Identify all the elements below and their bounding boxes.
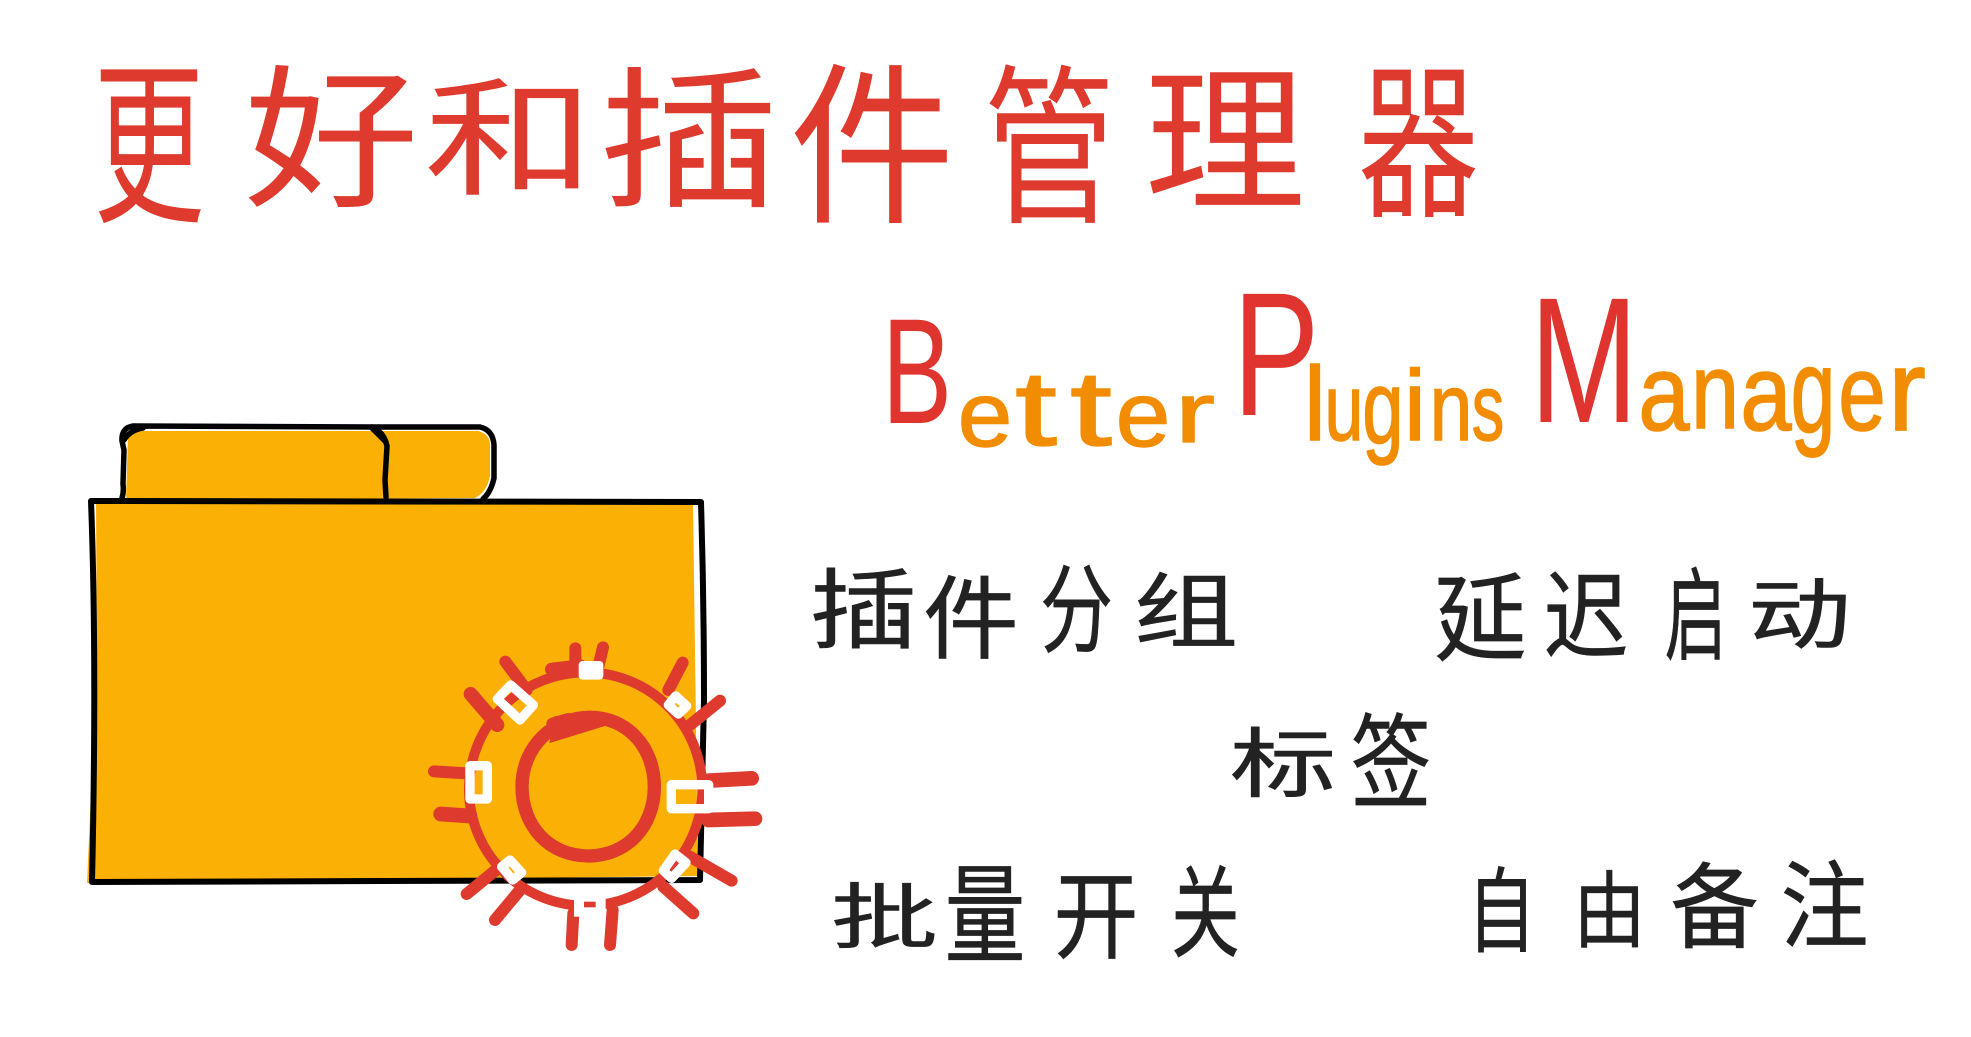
icon: folder <box>87 426 704 883</box>
feature label: 批量开关: 量 <box>945 857 1025 977</box>
feature label: 插件分组: 分 <box>1040 557 1113 666</box>
title: 更好和插件管理器 <box>94 49 1479 247</box>
feature label: 自由备注: 注 <box>1780 855 1869 960</box>
selection handles <box>470 661 709 917</box>
feature label: 插件分组: 组 <box>1134 566 1238 658</box>
title: 更好和插件管理器: 理 <box>1145 55 1305 231</box>
subtitle: Better Plugins Manager: r <box>1175 366 1215 461</box>
feature label: 自由备注: 备 <box>1670 857 1759 961</box>
folder tab <box>122 426 494 500</box>
title: 更好和插件管理器: 管 <box>984 55 1115 246</box>
subtitle: Better Plugins Manager: n <box>1691 331 1739 451</box>
subtitle: Better Plugins Manager: n <box>1430 354 1472 461</box>
subtitle: Better Plugins Manager: a <box>1740 333 1792 454</box>
subtitle: Better Plugins Manager: g <box>1791 324 1835 458</box>
subtitle: Better Plugins Manager: P <box>1233 256 1319 453</box>
feature label: 批量开关 <box>831 857 1240 977</box>
title: 更好和插件管理器: 件 <box>789 51 955 246</box>
feature label: 自由备注: 由 <box>1573 865 1646 958</box>
subtitle: Better Plugins Manager: g <box>1362 349 1404 466</box>
feature label: 插件分组: 件 <box>923 569 1019 670</box>
feature label: 自由备注: 自 <box>1467 862 1536 965</box>
feature label: 标签: 标 <box>1230 722 1336 807</box>
subtitle: Better Plugins Manager: s <box>1472 355 1504 461</box>
feature label: 延迟启动 <box>1434 560 1851 674</box>
feature label: 延迟启动: 启 <box>1665 560 1726 674</box>
feature label: 批量开关: 开 <box>1054 865 1138 972</box>
subtitle: Better Plugins Manager: e <box>958 364 1012 466</box>
feature label: 延迟启动: 迟 <box>1544 565 1628 672</box>
feature label: 标签: 签 <box>1351 708 1431 821</box>
subtitle: Better Plugins Manager: e <box>1838 332 1886 453</box>
icon: red gear with white selection handles <box>434 647 755 945</box>
subtitle: Better Plugins Manager: B <box>882 289 952 455</box>
feature label: 延迟启动: 动 <box>1748 572 1851 659</box>
subtitle: Better Plugins Manager: r <box>1888 327 1926 455</box>
feature label: 标签 <box>1230 708 1431 821</box>
feature label: 插件分组 <box>810 557 1238 670</box>
folder body <box>87 501 704 883</box>
feature label: 插件分组: 插 <box>810 562 917 660</box>
title: 更好和插件管理器: 好 <box>244 55 419 227</box>
subtitle: Better Plugins Manager: u <box>1325 353 1363 460</box>
feature label: 自由备注 <box>1467 855 1869 965</box>
subtitle: Better Plugins Manager: i <box>1404 350 1426 462</box>
subtitle: Better Plugins Manager: a <box>1638 333 1690 454</box>
gear outer ring <box>469 672 702 906</box>
subtitle: Better Plugins Manager <box>882 256 1926 468</box>
subtitle: Better Plugins Manager: t <box>1015 349 1057 468</box>
gear teeth <box>434 647 755 945</box>
feature label: 批量开关: 批 <box>831 878 938 958</box>
title: 更好和插件管理器: 插 <box>599 58 779 228</box>
feature label: 延迟启动: 延 <box>1434 566 1527 673</box>
subtitle: Better Plugins Manager: l <box>1304 345 1326 463</box>
subtitle: Better Plugins Manager: M <box>1530 261 1638 461</box>
title: 更好和插件管理器: 器 <box>1358 52 1479 240</box>
title: 更好和插件管理器: 和 <box>424 68 595 212</box>
title: 更好和插件管理器: 更 <box>94 49 204 247</box>
gear inner ring <box>522 712 654 856</box>
subtitle: Better Plugins Manager: t <box>1070 349 1112 468</box>
feature label: 批量开关: 关 <box>1171 859 1240 971</box>
subtitle: Better Plugins Manager: e <box>1116 364 1170 466</box>
